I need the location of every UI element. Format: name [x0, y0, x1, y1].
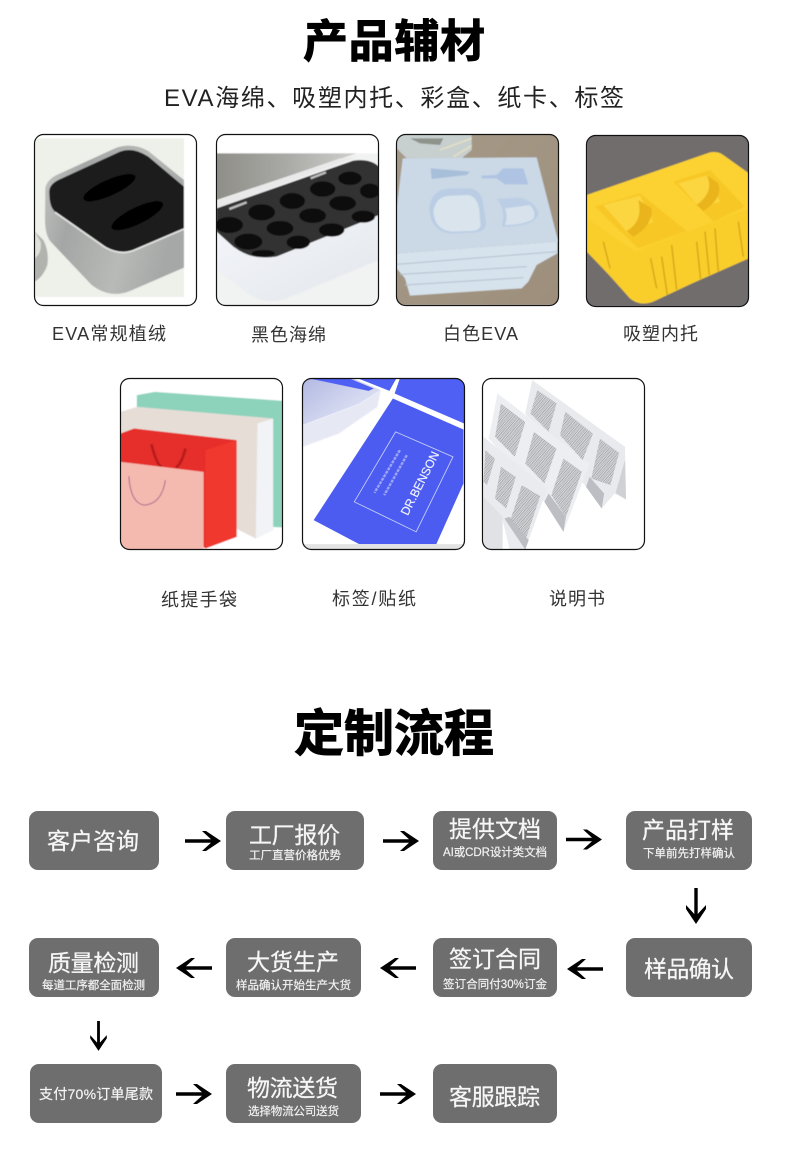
arrow right 2 [383, 831, 419, 851]
caption: 黑色海绵: 黑色海绵 [251, 325, 326, 345]
panel: 黑色海绵 image [215, 134, 380, 306]
panel: 吸塑内托 image [586, 135, 749, 306]
arrow down 2 [90, 1021, 107, 1051]
arrow down 1 [686, 888, 706, 924]
flow step: 质量检测 [29, 938, 159, 997]
flow step: 大货生产: 大货生产 [247, 949, 339, 975]
flow step: 产品打样: 产品打样 [642, 817, 734, 843]
flow step: 客服跟踪 [433, 1064, 557, 1123]
flow step: 提供文档: 提供文档 [449, 816, 541, 842]
flow step: 工厂报价 [226, 811, 364, 870]
flow step: 签订合同: 签订合同 [449, 946, 541, 972]
arrow right 3 [566, 830, 602, 850]
flow step: 质量检测: 每道工序都全面检测 [42, 978, 145, 992]
arrow right 4 [176, 1084, 212, 1104]
flow step: 产品打样: 下单前先打样确认 [643, 846, 736, 860]
flow step: 物流送货: 选择物流公司送货 [248, 1104, 339, 1118]
flow step: 签订合同 [433, 938, 557, 997]
arrow left 2 [380, 958, 416, 978]
caption: 说明书: 说明书 [549, 589, 605, 609]
panel: 标签/贴纸 image: DR.BENSON [398, 449, 442, 517]
flow step: 工厂报价: 工厂直营价格优势 [249, 848, 342, 862]
flow step: 大货生产: 样品确认开始生产大货 [236, 978, 351, 992]
panel: 说明书 image [482, 378, 644, 550]
caption: 白色EVA: 白色EVA [443, 324, 518, 344]
flow step: 签订合同: 签订合同付30%订金 [443, 977, 548, 991]
arrow left 1 [567, 959, 603, 979]
flow step: 提供文档 [433, 811, 557, 870]
caption: 标签/贴纸: 标签/贴纸 [332, 589, 416, 609]
panel: EVA常规植绒 image [34, 134, 197, 306]
subtitle: EVA海绵、吸塑内托、彩盒、纸卡、标签 [164, 85, 624, 112]
flow step: 客户咨询 [29, 811, 159, 870]
flow step: 样品确认: 样品确认 [644, 956, 734, 982]
flow step: 客服跟踪: 客服跟踪 [449, 1084, 540, 1110]
caption: EVA常规植绒: EVA常规植绒 [52, 324, 166, 344]
flow step: 产品打样 [626, 811, 752, 870]
flow step: 支付70%订单尾款 [30, 1064, 162, 1123]
flow step: 工厂报价: 工厂报价 [249, 822, 340, 848]
arrow left 3 [176, 958, 212, 978]
title: 定制流程: 定制流程 [294, 706, 494, 762]
flow step: 物流送货 [226, 1064, 361, 1123]
flow step: 大货生产 [226, 938, 361, 997]
title: 产品辅材: 产品辅材 [303, 16, 485, 67]
flow step: 样品确认 [626, 938, 752, 997]
caption: 吸塑内托: 吸塑内托 [623, 324, 698, 344]
flow step: 客户咨询: 客户咨询 [47, 828, 139, 854]
panel: 纸提手袋 image [120, 378, 282, 550]
flow step: 提供文档: AI或CDR设计类文档 [443, 845, 547, 859]
flow step: 物流送货: 物流送货 [247, 1075, 338, 1101]
panel: 标签/贴纸 image [302, 378, 464, 550]
arrow right 1 [185, 831, 221, 851]
flow step: 质量检测: 质量检测 [48, 950, 139, 976]
panel: 白色EVA image [396, 134, 559, 306]
arrow right 5 [380, 1084, 416, 1104]
caption: 纸提手袋: 纸提手袋 [161, 590, 237, 610]
flow step: 支付70%订单尾款: 支付70%订单尾款 [39, 1086, 153, 1102]
